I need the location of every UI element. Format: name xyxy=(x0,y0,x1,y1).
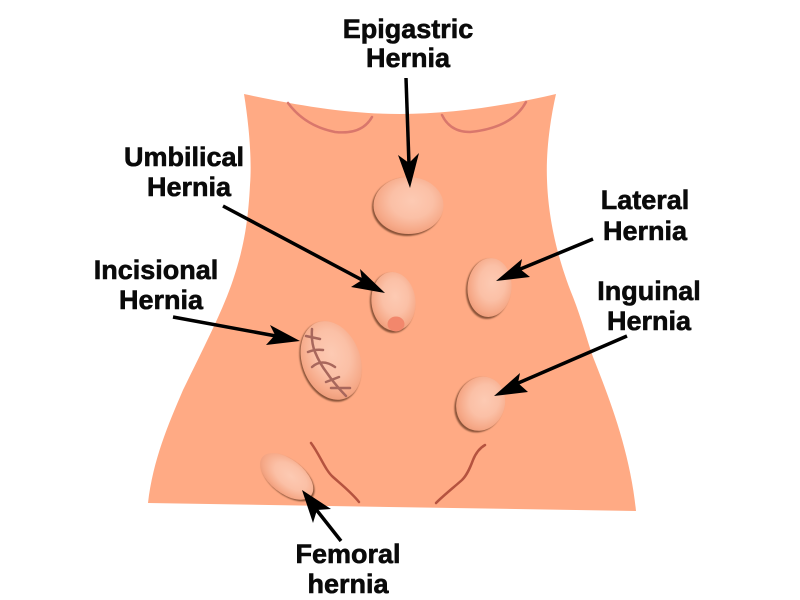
torso body xyxy=(148,94,636,511)
arrow: lateral xyxy=(496,239,593,281)
label: Femoral hernia: Femoral xyxy=(295,539,401,569)
label: Lateral Hernia: Hernia xyxy=(603,216,688,246)
bump: femoral hernia xyxy=(252,444,323,510)
bump: incisional hernia with stitches xyxy=(289,312,372,410)
arrow: epigastric xyxy=(398,78,419,188)
arrow: incisional xyxy=(173,317,300,345)
arrow: inguinal xyxy=(494,336,627,396)
label: Inguinal Hernia: Inguinal xyxy=(597,276,701,306)
label: Inguinal Hernia: Hernia xyxy=(607,306,692,336)
umbilicus xyxy=(388,316,404,332)
arrow: femoral xyxy=(302,490,341,541)
stitches xyxy=(306,329,350,396)
label: Umbilical Hernia: Umbilical xyxy=(124,142,244,172)
bump: epigastric hernia xyxy=(372,177,444,236)
label: Epigastric Hernia: Hernia xyxy=(366,43,451,73)
label: Incisional Hernia: Hernia xyxy=(119,285,204,315)
label: Lateral Hernia: Lateral xyxy=(601,185,689,215)
label: Epigastric Hernia: Epigastric xyxy=(343,14,473,44)
label: Incisional Hernia: Incisional xyxy=(94,255,218,285)
label: Femoral hernia: hernia xyxy=(307,569,389,599)
bump: inguinal hernia xyxy=(446,369,513,440)
bump: lateral hernia xyxy=(463,256,514,321)
label: Umbilical Hernia: Hernia xyxy=(147,172,232,202)
bump: umbilical hernia xyxy=(367,270,418,335)
arrow: umbilical xyxy=(223,206,385,293)
chest and groin creases xyxy=(288,102,526,503)
